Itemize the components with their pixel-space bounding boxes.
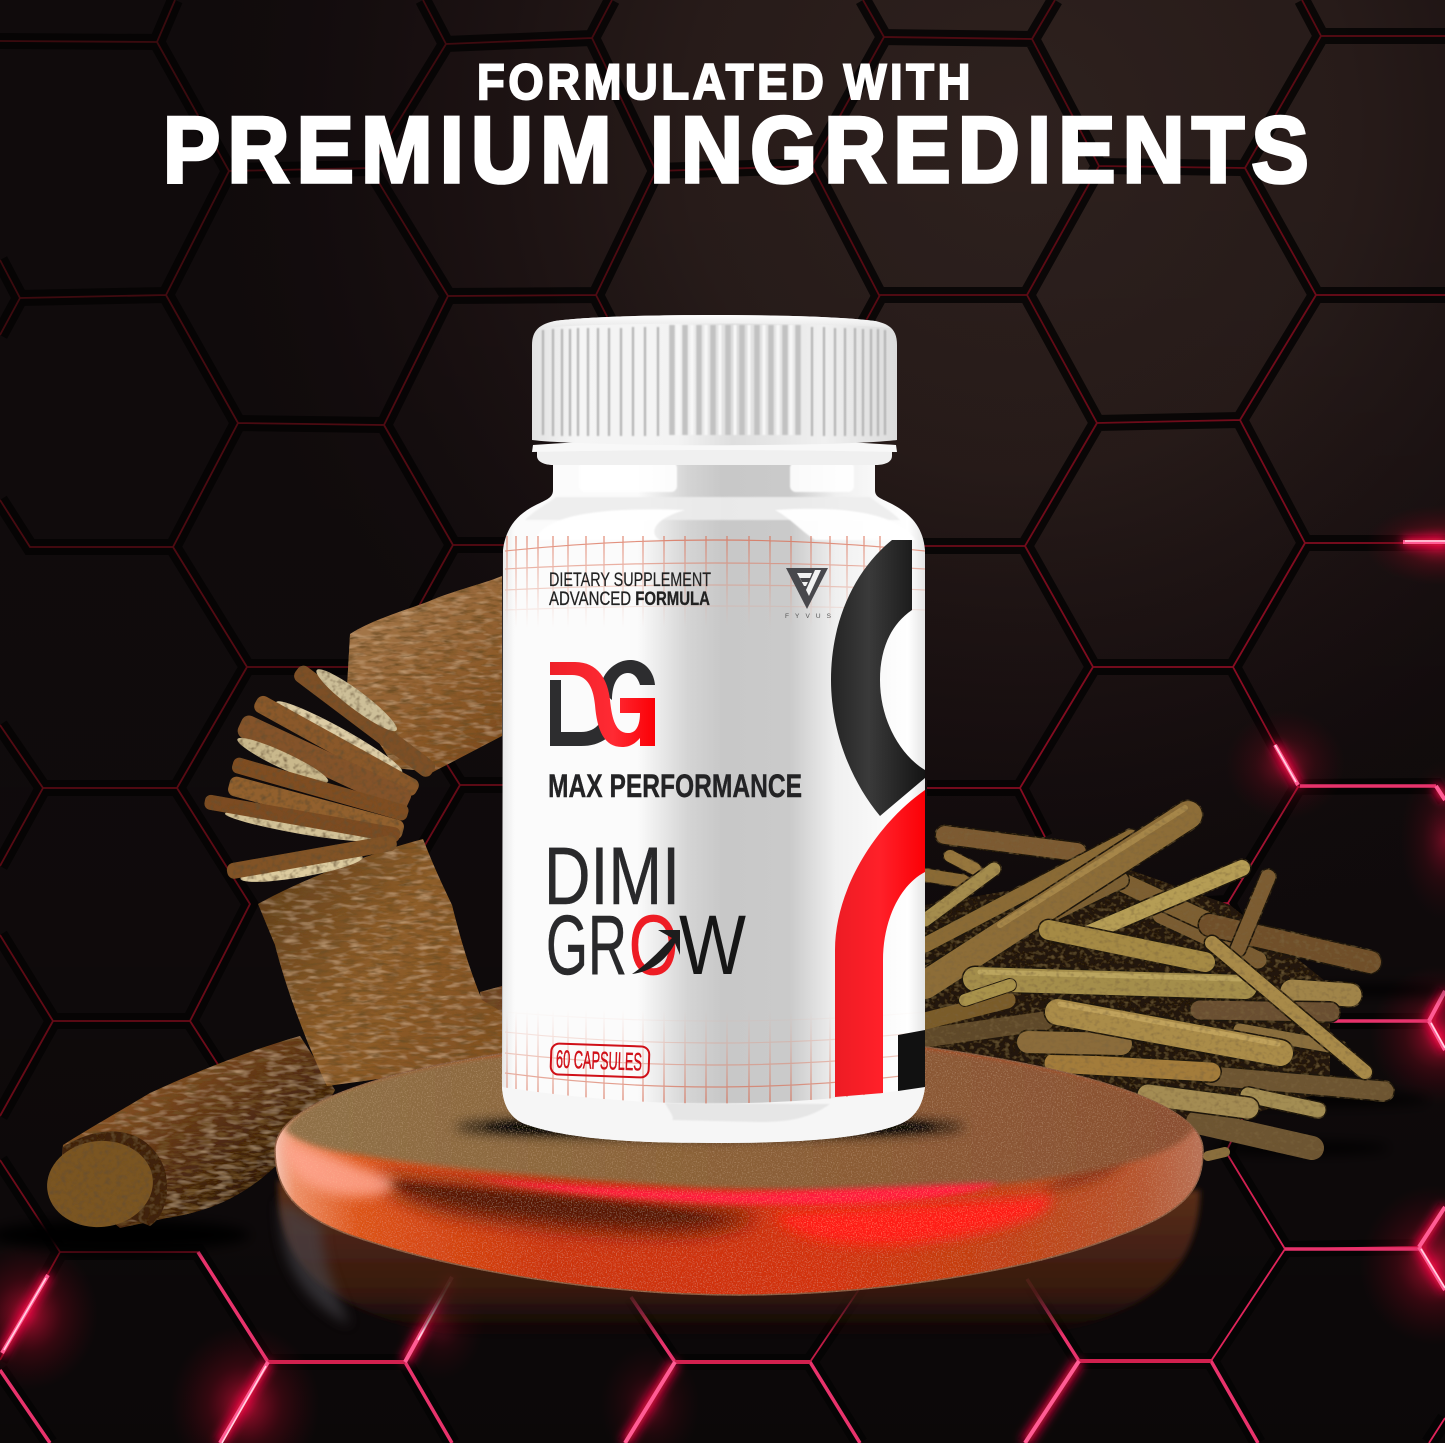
label tagline: ADVANCED FORMULA: [549, 589, 710, 610]
lower log: [60, 986, 502, 1228]
slices: [202, 653, 445, 890]
stump: [258, 839, 502, 1086]
DG logo: [550, 660, 655, 747]
FYVUS logo: FYVUS: [785, 613, 832, 620]
illustration: ashwagandha root pile: [925, 808, 1384, 1156]
title: PREMIUM INGREDIENTS: [163, 97, 1316, 202]
label grid: [505, 536, 925, 1104]
product name: GR: [546, 898, 627, 992]
FYVUS logo: [785, 568, 832, 620]
neck highlights: [525, 462, 915, 540]
illustration: cassava root and slices: [43, 576, 502, 1232]
title: FORMULATED WITH: [477, 54, 974, 110]
dark maroon reflection: [375, 1175, 760, 1234]
bottle cap: [532, 315, 897, 465]
product name: [544, 831, 746, 992]
red arch graphic: [835, 790, 925, 1097]
product name: W: [679, 898, 746, 992]
top surface: [285, 1043, 1195, 1191]
bottle base: [502, 1087, 925, 1143]
label tagline: [549, 570, 711, 610]
product name: O: [629, 898, 678, 992]
red hot bands: [470, 1178, 1000, 1206]
left highlight: [282, 1140, 395, 1197]
upper root piece: [347, 576, 502, 772]
label tagline: DIETARY SUPPLEMENT: [549, 570, 711, 591]
reflection of platform on floor: [278, 1180, 1200, 1342]
growth arrow: [632, 930, 680, 974]
floor shadows right of root pile: [0, 985, 1445, 1251]
capacity badge: [550, 1043, 649, 1078]
title: [163, 54, 1316, 202]
black ring graphic: [831, 540, 925, 816]
platform podium: [275, 1043, 1203, 1295]
product name: DIMI: [544, 831, 680, 922]
product bottle: [502, 315, 925, 1143]
bottle body: [502, 460, 925, 1143]
shadow under bottle: [455, 1116, 965, 1138]
log end cap: [43, 1131, 167, 1232]
subtitle: MAX PERFORMANCE: [548, 768, 802, 804]
neon glow accents: [0, 505, 1445, 1443]
black block graphic: [898, 1030, 925, 1091]
capacity badge: 60 CAPSULES: [556, 1045, 642, 1076]
